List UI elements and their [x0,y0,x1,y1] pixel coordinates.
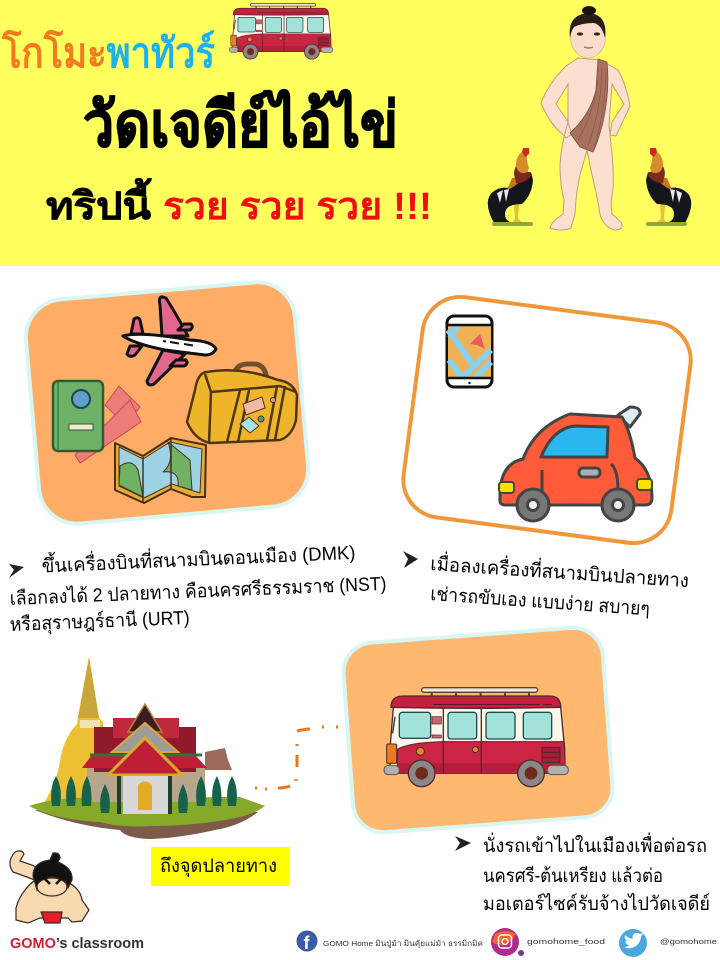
text block: step 3 bus and motorbike: นั่งรถเข้าไปในเมืองเพื่อต่อรถ [483,832,707,857]
label: destination reached [151,847,289,886]
instagram handle: gomohome_food [527,937,605,946]
facebook page name: GOMO Home มินปู่ม้า มินคุ้ยแม่ม้า ธรรมิกมิค [323,939,483,948]
header panel [0,0,720,266]
icon: passport [53,381,103,451]
icon: airplane [123,297,216,385]
text block: step 2 car [403,550,690,620]
text block: step 1 flight [9,539,387,637]
panel: car rental [399,292,695,548]
panel: airplane and travel items [23,279,311,527]
icon: folded map [115,438,206,503]
icon: facebook [296,930,318,953]
text block: step 2 car: เช่ารถขับเอง แบบง่าย สบายๆ [430,584,651,620]
arrow bullet [455,836,471,851]
dotted connector arrow [255,727,338,789]
icon: suitcase [187,364,297,443]
sub heading [46,178,432,228]
icon: red bus [384,688,568,787]
text block: step 2 car: เมื่อลงเครื่องที่สนามบินปลายทาง [430,550,690,592]
twitter handle: @gomohome [660,937,717,946]
icon: instagram [491,928,524,956]
illustration: boy with sash [541,6,630,230]
illustration: right rooster [646,148,691,226]
icon: red car [499,407,652,521]
sub heading: รวย รวย รวย !!! [163,186,432,228]
icon: header bus [229,4,333,59]
brand: GOMO's classroom: GOMO’s classroom [10,936,144,952]
arrow bullet [9,564,24,578]
brand title: โกโมะพาทัวร์: โกโมะพาทัวร์ [1,29,215,76]
illustration: left rooster [488,148,533,226]
illustration: sumo mascot [10,851,89,923]
icon: twitter [619,929,647,957]
panel: bus transfer [341,626,615,834]
icon: phone with map [447,316,492,387]
text block: step 1 flight: เลือกลงได้ 2 ปลายทาง คือนครศรีธรรมราช (NST) [9,573,387,610]
text block: step 3 bus and motorbike [455,832,710,915]
label: destination reached: ถึงจุดปลายทาง [160,856,277,878]
text block: step 3 bus and motorbike: นครศรี-ต้นเหรียง แล้วต่อ [483,865,663,887]
text block: step 1 flight: ขึ้นเครื่องบินที่สนามบินดอนเมือง (DMK) [41,539,356,577]
main heading: วัดเจดีย์ไอ้ไข่ [83,89,398,160]
sub heading: ทริปนี้ [46,178,152,228]
text block: step 3 bus and motorbike: มอเตอร์ไซค์รับจ้างไปวัดเจดีย์ [483,893,710,915]
icon: facebook: f [304,933,310,953]
text block: step 1 flight: หรือสุราษฎร์ธานี (URT) [9,607,190,637]
icon: tickets [75,386,141,463]
arrow bullet [403,551,418,568]
illustration: temple [29,657,265,839]
footer: social links [296,928,717,957]
